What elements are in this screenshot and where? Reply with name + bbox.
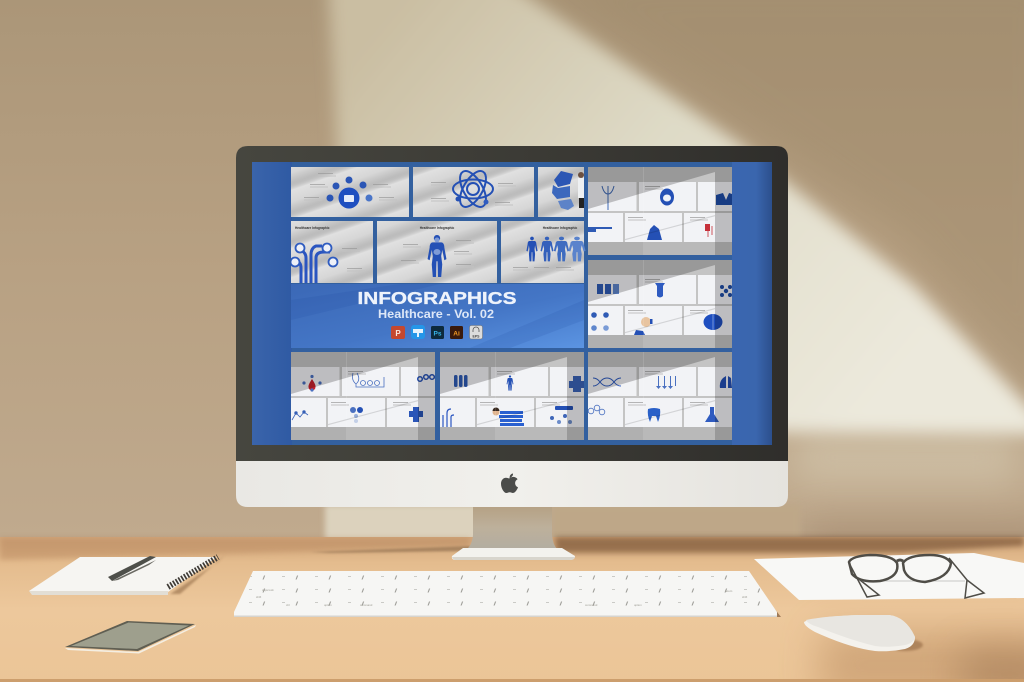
- icon: Photoshop: [431, 326, 444, 339]
- icon: body figure: [507, 375, 513, 391]
- icon: dots cross: [720, 285, 732, 297]
- icon: three boxes: [597, 284, 619, 294]
- monitor stand: [452, 506, 575, 560]
- keyboard: [234, 571, 781, 617]
- icon: hexagons: [588, 405, 605, 415]
- icon: stethoscope: [352, 373, 384, 387]
- key labels: ctrl: [286, 603, 290, 607]
- icon: bar and circles: [550, 406, 573, 424]
- icon: blood drop: [302, 375, 322, 392]
- subtitle: Healthcare - Vol. 02: [378, 309, 494, 321]
- icon: hand holding pill: [634, 317, 652, 335]
- slide: tree diagram: [290, 221, 373, 284]
- icon: medical cross: [409, 407, 423, 422]
- key labels: option: [634, 603, 642, 607]
- icon: bar: [588, 227, 612, 232]
- tablet: [65, 621, 196, 654]
- icon: blue cross: [569, 376, 584, 392]
- slide: human body with organs: [377, 221, 497, 283]
- notebook: [29, 555, 225, 595]
- icon: four circles: [591, 312, 609, 331]
- pen: [108, 556, 156, 581]
- icon: blood bag: [705, 224, 712, 237]
- slide: hub diagram: [291, 167, 409, 217]
- slide: four body silhouettes: Healthcare Infographic: [543, 226, 577, 230]
- panel: slides collage B: [588, 260, 732, 348]
- icon: drips: [656, 376, 676, 389]
- icon: Keynote: [411, 325, 425, 339]
- panel: slides collage D: [440, 352, 584, 440]
- icon: PowerPoint: [391, 326, 405, 339]
- key labels: option: [324, 603, 332, 607]
- key labels: command: [585, 603, 598, 607]
- icon: Illustrator: Ai: [453, 330, 460, 338]
- icon: lungs: [720, 376, 732, 388]
- icon: test tube: [655, 283, 665, 298]
- panel: slides collage E: [588, 352, 732, 440]
- icon: DNA helix: [593, 378, 621, 386]
- panel: slides collage C: [291, 352, 435, 440]
- icon: caduceus: [602, 186, 614, 210]
- key labels: [256, 588, 747, 607]
- wooden desk: [0, 537, 1024, 682]
- screen: [252, 162, 772, 445]
- icon: hexagon chain: [418, 375, 434, 381]
- icon: Photoshop: Ps: [434, 330, 442, 338]
- banner: product title: [291, 284, 584, 348]
- icon: PowerPoint: P: [395, 329, 401, 338]
- monitor bezel: [236, 146, 788, 462]
- iMac monitor: [236, 146, 788, 507]
- slides: top rows: [290, 167, 586, 284]
- mouse: [804, 615, 923, 651]
- icon: brain: [704, 314, 722, 330]
- icon: flask: [705, 407, 719, 422]
- icon: blue block: [716, 193, 732, 205]
- key labels: return: [725, 589, 733, 593]
- slide: four body silhouettes: [501, 221, 586, 283]
- panel: slides collage A: [588, 167, 732, 255]
- icon: branching tree: [443, 409, 454, 427]
- slide: human body with organs: Healthcare Infographic: [420, 226, 454, 230]
- eyeglasses: [849, 555, 984, 598]
- spiral binding: [168, 557, 218, 587]
- icon: torso: [647, 225, 662, 240]
- icon: EPS file: [470, 326, 482, 339]
- icon: oxygen tubes: [454, 375, 468, 387]
- slide: tree diagram: Healthcare Infographic: [295, 226, 330, 230]
- icon: apple logo: [501, 474, 518, 493]
- key labels: shift: [256, 595, 261, 599]
- slide: pentagons and doctor: [538, 167, 584, 217]
- icon: EPS file: EPS: [472, 334, 480, 338]
- icon: pills: [350, 407, 363, 423]
- icon: molecule: [292, 411, 308, 420]
- key labels: caps lock: [262, 588, 274, 592]
- slide: atom diagram: [413, 167, 534, 217]
- monitor chin: [236, 461, 788, 507]
- paper sheet: [754, 553, 1024, 600]
- key labels: command: [360, 603, 373, 607]
- icon: head: [660, 188, 674, 206]
- key labels: shift: [742, 595, 747, 599]
- icon: tooth: [648, 408, 660, 422]
- icon: Illustrator: [450, 326, 463, 339]
- icon: doctor with books: [492, 408, 524, 426]
- title: INFOGRAPHICS: [358, 288, 517, 308]
